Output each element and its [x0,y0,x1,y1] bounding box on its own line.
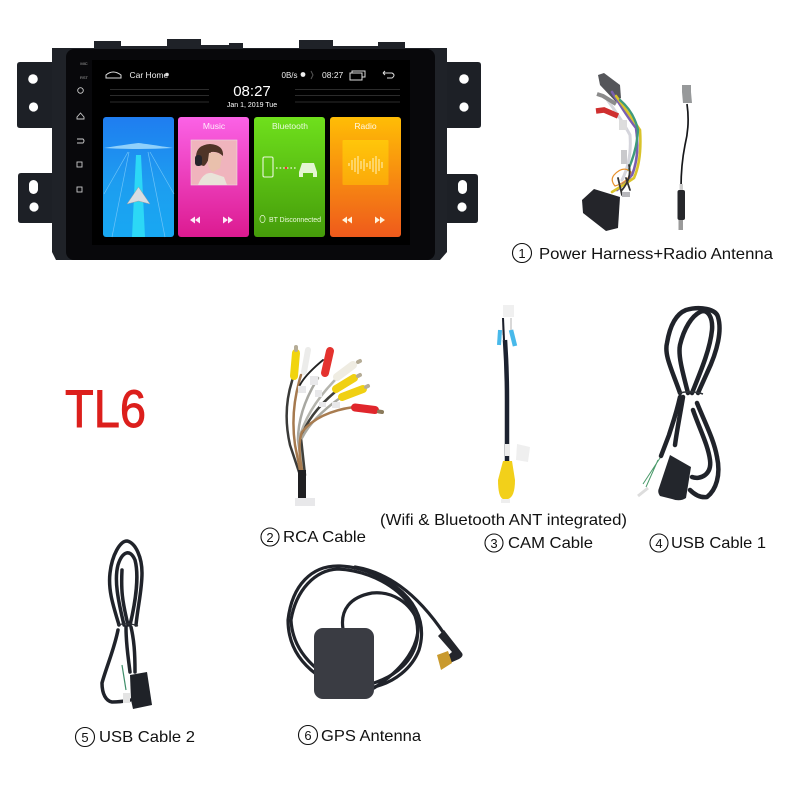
right mounting brackets [447,62,481,223]
side buttons [77,61,89,192]
label 5 [76,728,195,746]
label 1: 1 [518,246,526,261]
bare wires [643,458,660,487]
side buttons: MIC [80,61,88,66]
chassis [52,39,447,260]
cables [287,360,354,475]
wifi and bluetooth note: (Wifi & Bluetooth ANT integrated) [380,512,627,529]
wires [606,92,640,195]
label 5: 5 [81,730,89,745]
card: bluetooth [254,117,325,237]
label 4: USB Cable 1 [671,535,766,552]
card: radio [330,117,401,237]
bezel [66,49,435,260]
clock: Jan 1, 2019 Tue [227,102,277,109]
item 1: radio antenna [678,85,692,230]
clock: 08:27 [233,83,271,100]
RCA plugs [597,94,616,104]
clock [110,83,400,109]
antenna puck [314,628,374,699]
card: music: Music [203,121,226,131]
label 1: Power Harness+Radio Antenna [539,246,773,263]
tags [298,376,340,408]
bottom connector [582,189,620,231]
model name TL6: TL6 [65,380,146,439]
status bar: 0B/s [282,71,298,80]
item 2: RCA cable [287,347,382,506]
label 3: 3 [490,536,498,551]
label 2: 2 [266,530,274,545]
item 3: CAM cable [498,305,530,503]
label 6: GPS Antenna [321,728,421,745]
label 4: 4 [655,536,663,551]
status bar [106,70,394,80]
screen [92,60,410,245]
side buttons: RST [80,75,89,80]
status bar: Car Home [130,70,169,80]
plug block [298,470,306,498]
label 6: 6 [304,728,312,743]
item 1: power harness [582,73,640,231]
label 2: RCA Cable [283,529,366,546]
item 5: USB cable 2 [102,541,152,709]
card: bluetooth: BT Disconnected [269,217,321,224]
label 3: CAM Cable [508,535,593,552]
USB plug [658,455,691,500]
head unit [17,39,481,260]
status bar: 08:27 [322,70,344,80]
item 6: GPS antenna [288,566,463,699]
top connector [598,73,621,102]
left mounting brackets [17,62,53,223]
card: navigation [103,117,174,237]
label 6 [298,726,421,745]
card: bluetooth: Bluetooth [272,121,308,131]
card: music [178,117,249,237]
item 4: USB cable 1 [638,308,720,500]
card: radio: Radio [354,121,377,131]
label 5: USB Cable 2 [99,729,195,746]
plugs [294,347,382,412]
